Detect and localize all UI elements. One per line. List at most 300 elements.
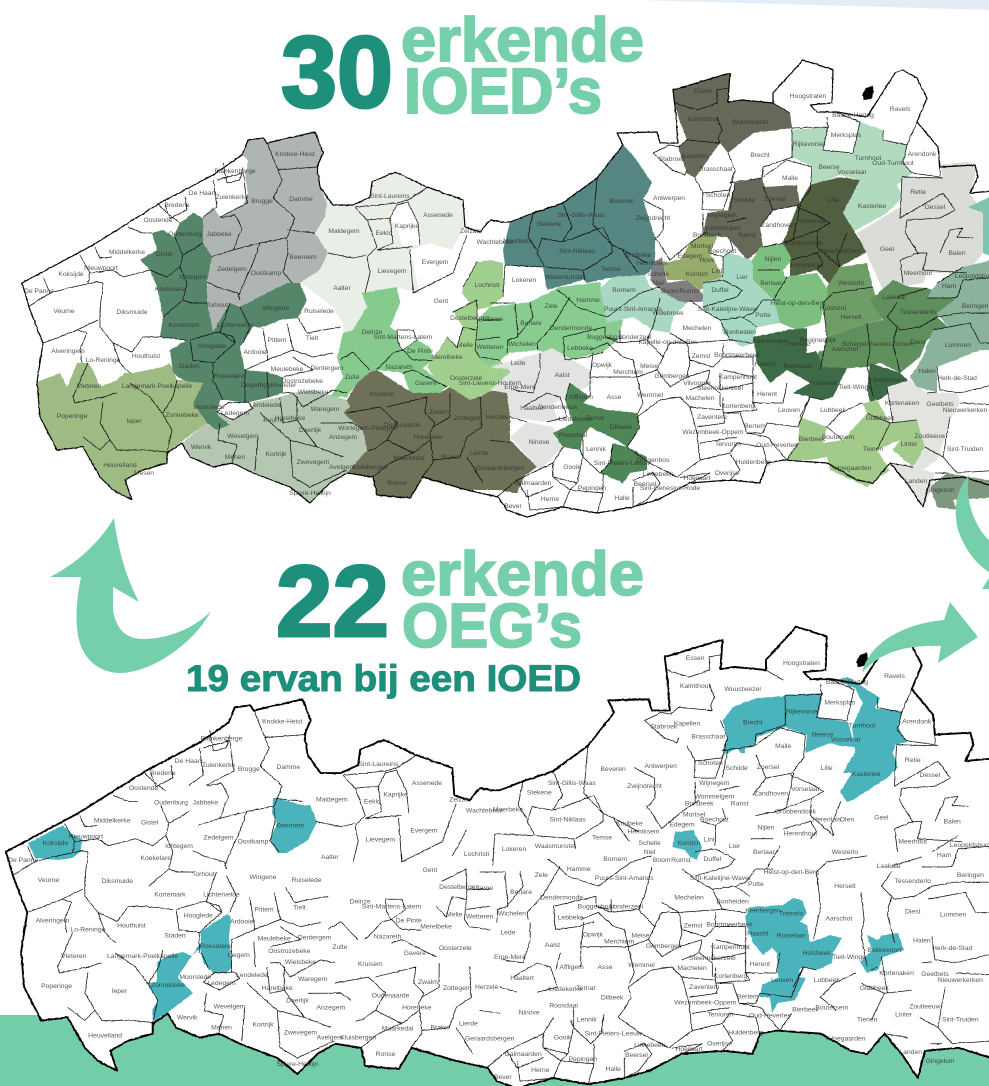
municipality labels: bottom map: Dentergem [298, 935, 332, 942]
municipality labels: bottom map: Hamme [567, 866, 591, 873]
municipality labels: top map: Ham [942, 283, 956, 290]
municipality labels: bottom map: Rotselaar [777, 933, 807, 940]
municipality labels: top map: Keerbergen [753, 338, 788, 345]
municipality labels: top map: Berlaar [760, 280, 783, 287]
municipality labels: top map: Lubbeek [820, 407, 846, 414]
municipality labels: bottom map: Mortsel [683, 811, 706, 818]
municipality labels: top map: Vorselaar [798, 218, 827, 225]
municipality labels: top map: Oostende [144, 217, 173, 224]
municipality labels: bottom map: Destelbergen [439, 884, 480, 891]
municipality labels: top map: Antwerpen [653, 195, 685, 202]
municipality labels: top map: Veurne [53, 308, 75, 315]
municipality labels: bottom map: Kortenberg [714, 973, 748, 980]
municipality labels: bottom map: Machelen [677, 965, 707, 972]
municipality labels: top map: Schelle [647, 271, 669, 278]
municipality labels: top map: Puurs-Sint-Amands [604, 306, 663, 313]
municipality labels: bottom map: Keerbergen [745, 907, 781, 914]
municipality labels: bottom map: Baarle-Hertog [826, 679, 868, 686]
heading: 22 erkende OEG's: erkende [401, 540, 644, 609]
municipality labels: top map: Putte [755, 312, 771, 319]
municipality labels: bottom map: Brecht [743, 720, 763, 727]
municipality labels: bottom map: Lievegem [366, 837, 395, 844]
municipality labels: bottom map: Meerhout [898, 839, 927, 846]
municipality labels: top map: Dilbeek [610, 424, 633, 431]
municipality labels: bottom map: Affligem [559, 964, 584, 971]
municipality labels: bottom map: Ravels [884, 673, 905, 680]
municipality labels: top map: Dentergem [310, 365, 344, 372]
municipality labels: top map: Ledegem [221, 410, 249, 417]
arrow: right, curving down from top map [956, 475, 989, 572]
municipality labels: bottom map: Beringen [957, 872, 984, 879]
municipality labels: top map: Pepingen [578, 485, 606, 492]
municipality labels: top map: Kampenhout [719, 374, 757, 381]
municipality labels: top map: Sint-Truiden [947, 446, 983, 453]
municipality labels: bottom map: Brasschaat [691, 734, 725, 741]
municipality labels: bottom map: Boechout [700, 817, 729, 824]
municipality labels: bottom map: Laakdal [877, 863, 901, 870]
municipality labels: bottom map: Oudenburg [154, 799, 188, 806]
municipality base [6, 627, 989, 1086]
municipality labels: bottom map: Herentals [812, 817, 842, 824]
municipality labels: top map: Stabroek [659, 156, 686, 163]
municipality labels: top map: Lummen [945, 342, 971, 349]
municipality labels: bottom map: Harelbeke [262, 985, 293, 992]
municipality labels: top map: Machelen [686, 395, 715, 402]
municipality labels: bottom map: Hoegaarden [828, 1036, 866, 1043]
municipality labels: top map: Kontich [686, 271, 708, 278]
municipality labels: top map: Tielt [306, 335, 318, 342]
municipality labels: top map: Pittem [268, 337, 287, 344]
municipality labels: top map: Lennik [586, 446, 607, 453]
municipality labels: top map: Gent [434, 298, 448, 305]
municipality borders [6, 627, 989, 1086]
municipality labels: bottom map: Dilbeek [601, 994, 624, 1001]
municipality labels: bottom map: Schelle [638, 840, 661, 847]
municipality labels: top map: Oud-Heverlee [756, 442, 798, 449]
municipality labels: top map: Landen [905, 478, 927, 485]
municipality labels: top map: Lede [511, 360, 526, 367]
municipality labels: bottom map: Wommelgem [694, 793, 735, 800]
municipality labels: bottom map: Roosdaal [549, 1002, 578, 1009]
municipality labels: top map: Anzegem [329, 434, 358, 441]
municipality labels: bottom map: Arendonk [902, 719, 932, 726]
municipality labels: bottom map: Kapellen [674, 721, 700, 728]
municipality labels: bottom map: Nazareth [374, 934, 401, 941]
municipality labels: bottom map: Sint-Niklaas [550, 817, 586, 824]
municipality labels: top map: Lokeren [512, 277, 536, 284]
municipality labels: bottom map: Herne [531, 1067, 550, 1074]
municipality labels: top map: Poperinge [57, 413, 88, 420]
municipality labels: top map: Eeklo [376, 230, 393, 237]
municipality labels: bottom map: Ninove [519, 1009, 540, 1016]
municipality labels: bottom map: Zulte [332, 944, 348, 951]
municipality labels: bottom map: Ranst [731, 800, 749, 807]
municipality labels: top map: Geetbets [926, 401, 954, 408]
municipality labels: top map: Aarschot [832, 346, 858, 353]
municipality labels: bottom map: Zandhoven [754, 790, 788, 797]
municipality labels: top map: Gistel [155, 251, 173, 258]
municipality labels: bottom map: Hooglede [184, 912, 213, 919]
municipality labels: bottom map: Erpe-Mere [494, 954, 526, 961]
municipality labels: bottom map: Sint-Katelijne-Waver [690, 875, 752, 882]
municipality labels: bottom map: Meulebeke [258, 936, 291, 943]
municipality labels: top map: Waasmunster [544, 274, 586, 281]
municipality labels: bottom map: Bredene [150, 770, 176, 777]
municipality labels: top map: Lebbeke [567, 345, 593, 352]
municipality labels: bottom map: Lierde [459, 1021, 478, 1028]
municipality labels: top map: Tervuren [715, 441, 741, 448]
municipality labels: top map: Willebroek [652, 310, 684, 317]
municipality labels: bottom map: Rijkevorsel [786, 708, 819, 715]
municipality labels: bottom map: Sint-Martens-Latem [362, 903, 422, 910]
municipality labels: top map: Hooglede [198, 343, 227, 350]
municipality labels: top map: Kortrijk [266, 451, 287, 458]
municipality labels: bottom map: Kalmthout [680, 683, 710, 690]
municipality labels: bottom map: Merelbeke [420, 924, 452, 931]
municipality labels: top map: Ardooie [243, 349, 267, 356]
municipality labels: top map: Kruisem [370, 391, 395, 398]
municipality labels: top map: Nieuwpoort [84, 265, 118, 272]
municipality labels: bottom map: Pittem [254, 906, 274, 913]
municipality labels: top map: Gooik [563, 464, 581, 471]
municipality labels: bottom map: Haaltert [510, 975, 534, 982]
municipality labels: bottom map: Wijnegem [699, 780, 730, 787]
municipality labels: top map: Geel [880, 246, 895, 253]
municipality labels: top map: Ternat [586, 415, 604, 422]
municipality labels: bottom map: Roeselare [200, 943, 231, 950]
municipality labels: top map: Damme [289, 196, 313, 203]
municipality labels: bottom map: Geetbets [921, 971, 949, 978]
municipality labels: bottom map: Heuvelland [88, 1033, 122, 1040]
municipality labels: top map: Wortegem-Petegem [338, 425, 398, 432]
municipality labels: bottom map: Linkebeek [634, 1042, 666, 1049]
municipality labels: top map: Wuustwezel [732, 119, 768, 126]
municipality labels: bottom map: Kluisbergen [340, 1035, 376, 1042]
municipality labels: top map: Sint-Genesius-Rode [640, 485, 700, 492]
municipality labels: top map: Moerbeke [503, 238, 533, 245]
municipality labels: top map: Vleteren [77, 383, 102, 390]
municipality labels: top map: Rumst [679, 288, 699, 295]
municipality labels: top map: Deinze [362, 329, 383, 336]
municipality labels: bottom map: Staden [164, 933, 186, 940]
municipality labels: bottom map: Dendermonde [540, 894, 583, 901]
municipality labels: top map: Boom [661, 288, 679, 295]
heading: 22 erkende OEG's [276, 540, 644, 661]
municipality labels: bottom map: Aarschot [825, 916, 852, 923]
municipality labels: top map [24, 88, 989, 510]
municipality labels: top map: Wervik [191, 444, 212, 451]
municipality labels: top map: Sint-Laureins [370, 193, 410, 200]
municipality labels: top map: Geraardsbergen [476, 465, 525, 472]
municipality labels: top map: Begijnendijk [800, 337, 837, 344]
municipality labels: top map: Asse [607, 394, 622, 401]
municipality labels: bottom map: Nieuwerkerken [938, 977, 983, 984]
municipality labels: bottom map: Wielsbeke [285, 959, 316, 966]
municipality labels: top map: Steenokkerzeel [697, 385, 744, 392]
municipality labels: bottom map: De Pinte [396, 918, 422, 925]
municipality labels: bottom map: Assenede [412, 780, 442, 787]
municipality labels: top map: Oudenburg [168, 231, 202, 238]
municipality labels: bottom map: Edegem [669, 822, 695, 829]
municipality labels: bottom map: Stabroek [650, 724, 678, 731]
municipality labels: top map: Bever [504, 503, 523, 510]
municipality labels: top map: Beringen [962, 303, 989, 310]
municipality labels: bottom map: Beerse [812, 732, 834, 739]
municipality labels: top map: Balen [948, 250, 966, 257]
municipality labels: top map: Lint [712, 268, 723, 275]
municipality labels: top map: Avelgem [329, 464, 355, 471]
municipality labels: bottom map: Schoten [698, 760, 723, 767]
municipality labels: top map: Zedelgem [217, 266, 247, 273]
municipality labels: bottom map: Tienen [857, 1017, 878, 1024]
municipality labels: top map: Zwijndrecht [636, 215, 670, 222]
municipality labels: bottom map: Geel [874, 815, 889, 822]
municipality labels: bottom map: Zelzate [449, 796, 472, 803]
municipality labels: bottom map: Gent [423, 867, 437, 874]
municipality labels: bottom map: Lier [729, 843, 741, 850]
municipality labels: bottom map: Wuustwezel [725, 686, 761, 693]
municipality labels: top map: Liedekerke [559, 416, 592, 423]
municipality labels: top map: Linter [901, 441, 918, 448]
municipality labels: top map: Beveren [610, 198, 635, 205]
municipality labels: bottom map: Poperinge [41, 983, 72, 990]
municipality labels: bottom map: Kruibeke [616, 821, 643, 828]
municipality labels: top map: De Pinte [407, 348, 433, 355]
municipality labels: bottom map: Retie [905, 757, 921, 764]
municipality labels: bottom map: Hoeilaart [676, 1046, 703, 1053]
municipality labels: bottom map: Glabbeek [860, 985, 889, 992]
municipality labels: top map: Westerlo [838, 280, 864, 287]
municipality labels: bottom map: Ieper [112, 988, 128, 995]
municipality labels: top map: Jabbeke [206, 231, 232, 238]
municipality labels: bottom map: Hoogstraten [783, 660, 820, 667]
municipality labels: top map: Izegem [241, 382, 263, 389]
municipality labels: bottom map: Lede [500, 930, 516, 937]
bottom green band [0, 1015, 989, 1086]
municipality labels: top map: Kortenaken [885, 400, 919, 407]
municipality labels: bottom map: Halle [605, 1066, 621, 1073]
municipality labels: top map: Meulebeke [271, 366, 304, 373]
municipality labels: bottom map: Deinze [350, 898, 371, 905]
municipality labels: bottom map: Dessel [920, 772, 941, 779]
municipality labels: top map: Mechelen [682, 325, 712, 332]
municipality labels: bottom map: Meise [631, 933, 650, 940]
municipality labels: top map: Boechout [708, 248, 736, 255]
municipality labels: bottom map: Westerlo [832, 849, 858, 856]
municipality labels: bottom map: Balen [944, 819, 961, 826]
municipality labels: top map: Assenede [423, 212, 453, 219]
municipality labels: bottom map: Ledegem [207, 980, 236, 987]
heading: 22 erkende OEG's: 22 [276, 546, 389, 658]
municipality labels: top map: Leuven [778, 407, 800, 414]
municipality labels: bottom map: Lummen [940, 911, 967, 918]
municipality labels: top map: Zemst [692, 353, 710, 360]
municipality labels: bottom map: Wezembeek-Oppem [674, 999, 737, 1006]
municipality labels: top map: Destelbergen [450, 315, 490, 322]
municipality labels: top map: Zwevegem [297, 459, 330, 466]
municipality labels: bottom map: Sint-Laureins [358, 761, 399, 768]
municipality labels: top map: Bornem [612, 287, 636, 294]
municipality labels: top map: Bekkevoort [873, 377, 907, 384]
municipality labels: top map: Schilde [733, 197, 755, 204]
municipality labels: bottom map: Oostkamp [237, 839, 269, 846]
top corner strip [640, 0, 989, 10]
municipality labels: top map: Duffel [711, 287, 729, 294]
municipality labels: top map: Meise [640, 363, 658, 370]
municipality labels: top map: Oostkamp [251, 270, 282, 277]
municipality labels: top map: Tremelo [786, 341, 810, 348]
municipality labels: bottom map: Antwerpen [645, 763, 677, 770]
municipality labels: top map: Sint-Lievens-Houtem [459, 380, 522, 387]
municipality labels: bottom map: Oud-Heverlee [749, 1012, 791, 1019]
municipality labels: bottom map: Veurne [38, 877, 59, 884]
municipality labels: bottom map: Wachtebeke [466, 807, 504, 814]
municipality labels: bottom map: Zele [535, 872, 548, 879]
municipality labels: top map: Roosdaal [559, 432, 588, 439]
municipality labels: top map: Zwalm [429, 409, 449, 416]
municipality labels: top map: Sint-Pieters-Leeuw [594, 460, 650, 467]
municipality labels: top map: Haacht [754, 361, 776, 368]
municipality labels: bottom map: Melle [446, 911, 463, 918]
municipality labels: top map: Lievegem [378, 268, 407, 275]
municipality labels: top map: Erpe-Mere [504, 384, 536, 391]
municipality labels: top map: Zottegem [454, 415, 483, 422]
municipality labels: top map: Lichtervelde [217, 322, 253, 329]
municipality labels: bottom map: Kortemark [154, 891, 186, 898]
municipality labels: top map: Evergem [422, 259, 449, 266]
municipality labels: top map: Affligem [569, 394, 593, 401]
arrow: right, small head fragment [982, 578, 989, 589]
municipality labels: bottom map: Temse [592, 835, 612, 842]
municipality labels: bottom map: Horebeke [402, 1004, 432, 1011]
municipality labels: top map: Merchtem [613, 369, 643, 376]
municipality labels: bottom map: Linter [895, 1011, 913, 1018]
municipality labels: bottom map: Ronse [376, 1051, 395, 1058]
municipality labels: bottom map [8, 655, 989, 1081]
municipality labels: bottom map: Zaventem [689, 984, 720, 991]
municipality labels: top map: Baarle-Hertog [832, 112, 874, 119]
municipality labels: bottom map: Aalter [321, 854, 339, 861]
municipality labels: top map: Aalter [333, 285, 352, 292]
municipality labels: top map: Huldenberg [736, 459, 771, 466]
municipality labels: top map: Wezembeek-Oppem [682, 429, 744, 436]
municipality labels: bottom map: Zottegem [443, 985, 472, 992]
municipality labels: bottom map: Zuienkerke [202, 762, 235, 769]
municipality labels: top map: Merksplas [831, 132, 862, 139]
municipality labels: bottom map: Nijlen [758, 825, 775, 832]
municipality labels: bottom map: Tielt [293, 904, 306, 911]
municipality labels: top map: Middelkerke [109, 249, 145, 256]
municipality labels: top map: Zulte [345, 374, 360, 381]
coloured IOED areas [22, 60, 989, 517]
municipality labels: top map: Wemmel [637, 392, 664, 399]
municipality labels: bottom map: Avelgem [317, 1035, 343, 1042]
municipality labels: bottom map: Oudenaarde [372, 992, 410, 999]
municipality labels: top map: Zandhoven [761, 222, 795, 229]
municipality labels: bottom map: Zemst [684, 923, 703, 930]
municipality labels: top map: Brasschaat [699, 166, 733, 173]
municipality labels: top map: Hulshout [820, 305, 846, 312]
municipality labels: top map: Vosselaar [837, 169, 867, 176]
municipality labels: top map: Meerhout [904, 270, 932, 277]
municipality labels: top map: Wachtebeke [477, 239, 514, 246]
municipality labels: bottom map: Zonnebeke [151, 982, 185, 989]
municipality labels: top map: Kaprijke [395, 223, 419, 230]
municipality labels: top map: Ninove [529, 439, 550, 446]
municipality labels: bottom map: Hemiksem [628, 829, 660, 836]
municipality labels: bottom map: Holsbeek [802, 950, 831, 957]
municipality labels: bottom map: Grobbendonk [775, 808, 816, 815]
municipality labels: bottom map: Beersel [625, 1052, 648, 1059]
municipality labels: bottom map: Merchtem [604, 939, 635, 946]
municipality labels: bottom map: Lennik [577, 1017, 597, 1024]
municipality labels: bottom map: Kortenaken [879, 970, 914, 977]
municipality labels: bottom map: Nieuwpoort [69, 834, 103, 841]
municipality labels: bottom map: Niel [644, 849, 656, 856]
municipality labels: top map: Scherpenheuvel-Zichem [842, 341, 915, 348]
municipality labels: bottom map: Sint-Truiden [942, 1017, 979, 1024]
municipality labels: top map: Niel [652, 280, 664, 287]
municipality labels: bottom map: Alveringem [36, 918, 70, 925]
municipality labels: bottom map: Maarkedal [382, 1026, 414, 1033]
municipality labels: top map: Denderleeuw [538, 404, 578, 411]
municipality labels: top map: Hoegaarden [835, 465, 872, 472]
municipality labels: bottom map: Moorslede [179, 974, 211, 981]
municipality labels: top map: Langemark-Poelkapelle [122, 383, 192, 390]
municipality labels: top map: Menen [225, 454, 246, 461]
municipality labels: top map: Zelzate [460, 228, 482, 235]
municipality labels: bottom map: Tessenderlo [894, 878, 931, 885]
municipality labels: bottom map: Lebbeke [558, 915, 584, 921]
municipality labels: bottom map: Malle [775, 743, 792, 750]
municipality labels: top map: Melle [457, 342, 473, 349]
municipality labels: bottom map: Waasmunster [535, 843, 577, 850]
municipality labels: top map: Hoeilaart [684, 475, 711, 482]
municipality labels: top map: Zoersel [764, 196, 787, 203]
municipality labels: bottom map: Kaprijke [383, 791, 408, 798]
municipality labels: top map: Hamme [576, 297, 600, 304]
municipality labels: top map: Lier [736, 274, 748, 281]
municipality labels: top map: Galmaarden [515, 480, 552, 487]
municipality labels: top map: Ingelmunster [258, 382, 297, 389]
municipality labels: bottom map: Evergem [410, 828, 438, 835]
municipality labels: bottom map: Gavere [404, 950, 426, 957]
municipality labels: top map: Wingene [263, 305, 289, 312]
municipality labels: top map: Brugge [251, 198, 273, 205]
municipality labels: bottom map: Tielt-Winge [832, 954, 866, 961]
municipality labels: bottom map: Haacht [747, 931, 769, 938]
municipality labels: top map: Hemiksem [636, 260, 668, 267]
municipality labels: bottom map: De Panne [8, 857, 38, 864]
municipality labels: top map: Hoogstraten [790, 93, 826, 100]
municipality labels: bottom map: Schilde [726, 765, 748, 772]
municipality labels: bottom map: Halen [913, 938, 931, 945]
municipality labels: top map: Tielt-Winge [838, 384, 872, 391]
municipality labels: top map: Bonheiden [724, 329, 756, 336]
municipality labels: bottom map: Blankenberge [201, 736, 243, 743]
municipality labels: top map: Sint-Martens-Latem [374, 334, 433, 341]
municipality labels: bottom map: Ternat [576, 985, 595, 992]
municipality labels: bottom map: Lendelede [236, 972, 268, 979]
municipality labels: bottom map: Laarne [472, 885, 493, 892]
municipality labels: bottom map: Boutersem [815, 1004, 848, 1011]
municipality labels: top map: Berlare [520, 320, 542, 327]
municipality labels: bottom map: Stekene [527, 789, 552, 796]
municipality labels: bottom map: Brakel [431, 1025, 450, 1032]
municipality labels: top map: Wommelgem [702, 225, 742, 232]
municipality labels: top map: Bierbeek [799, 436, 826, 443]
municipality labels: top map: Dendermonde [550, 325, 592, 332]
